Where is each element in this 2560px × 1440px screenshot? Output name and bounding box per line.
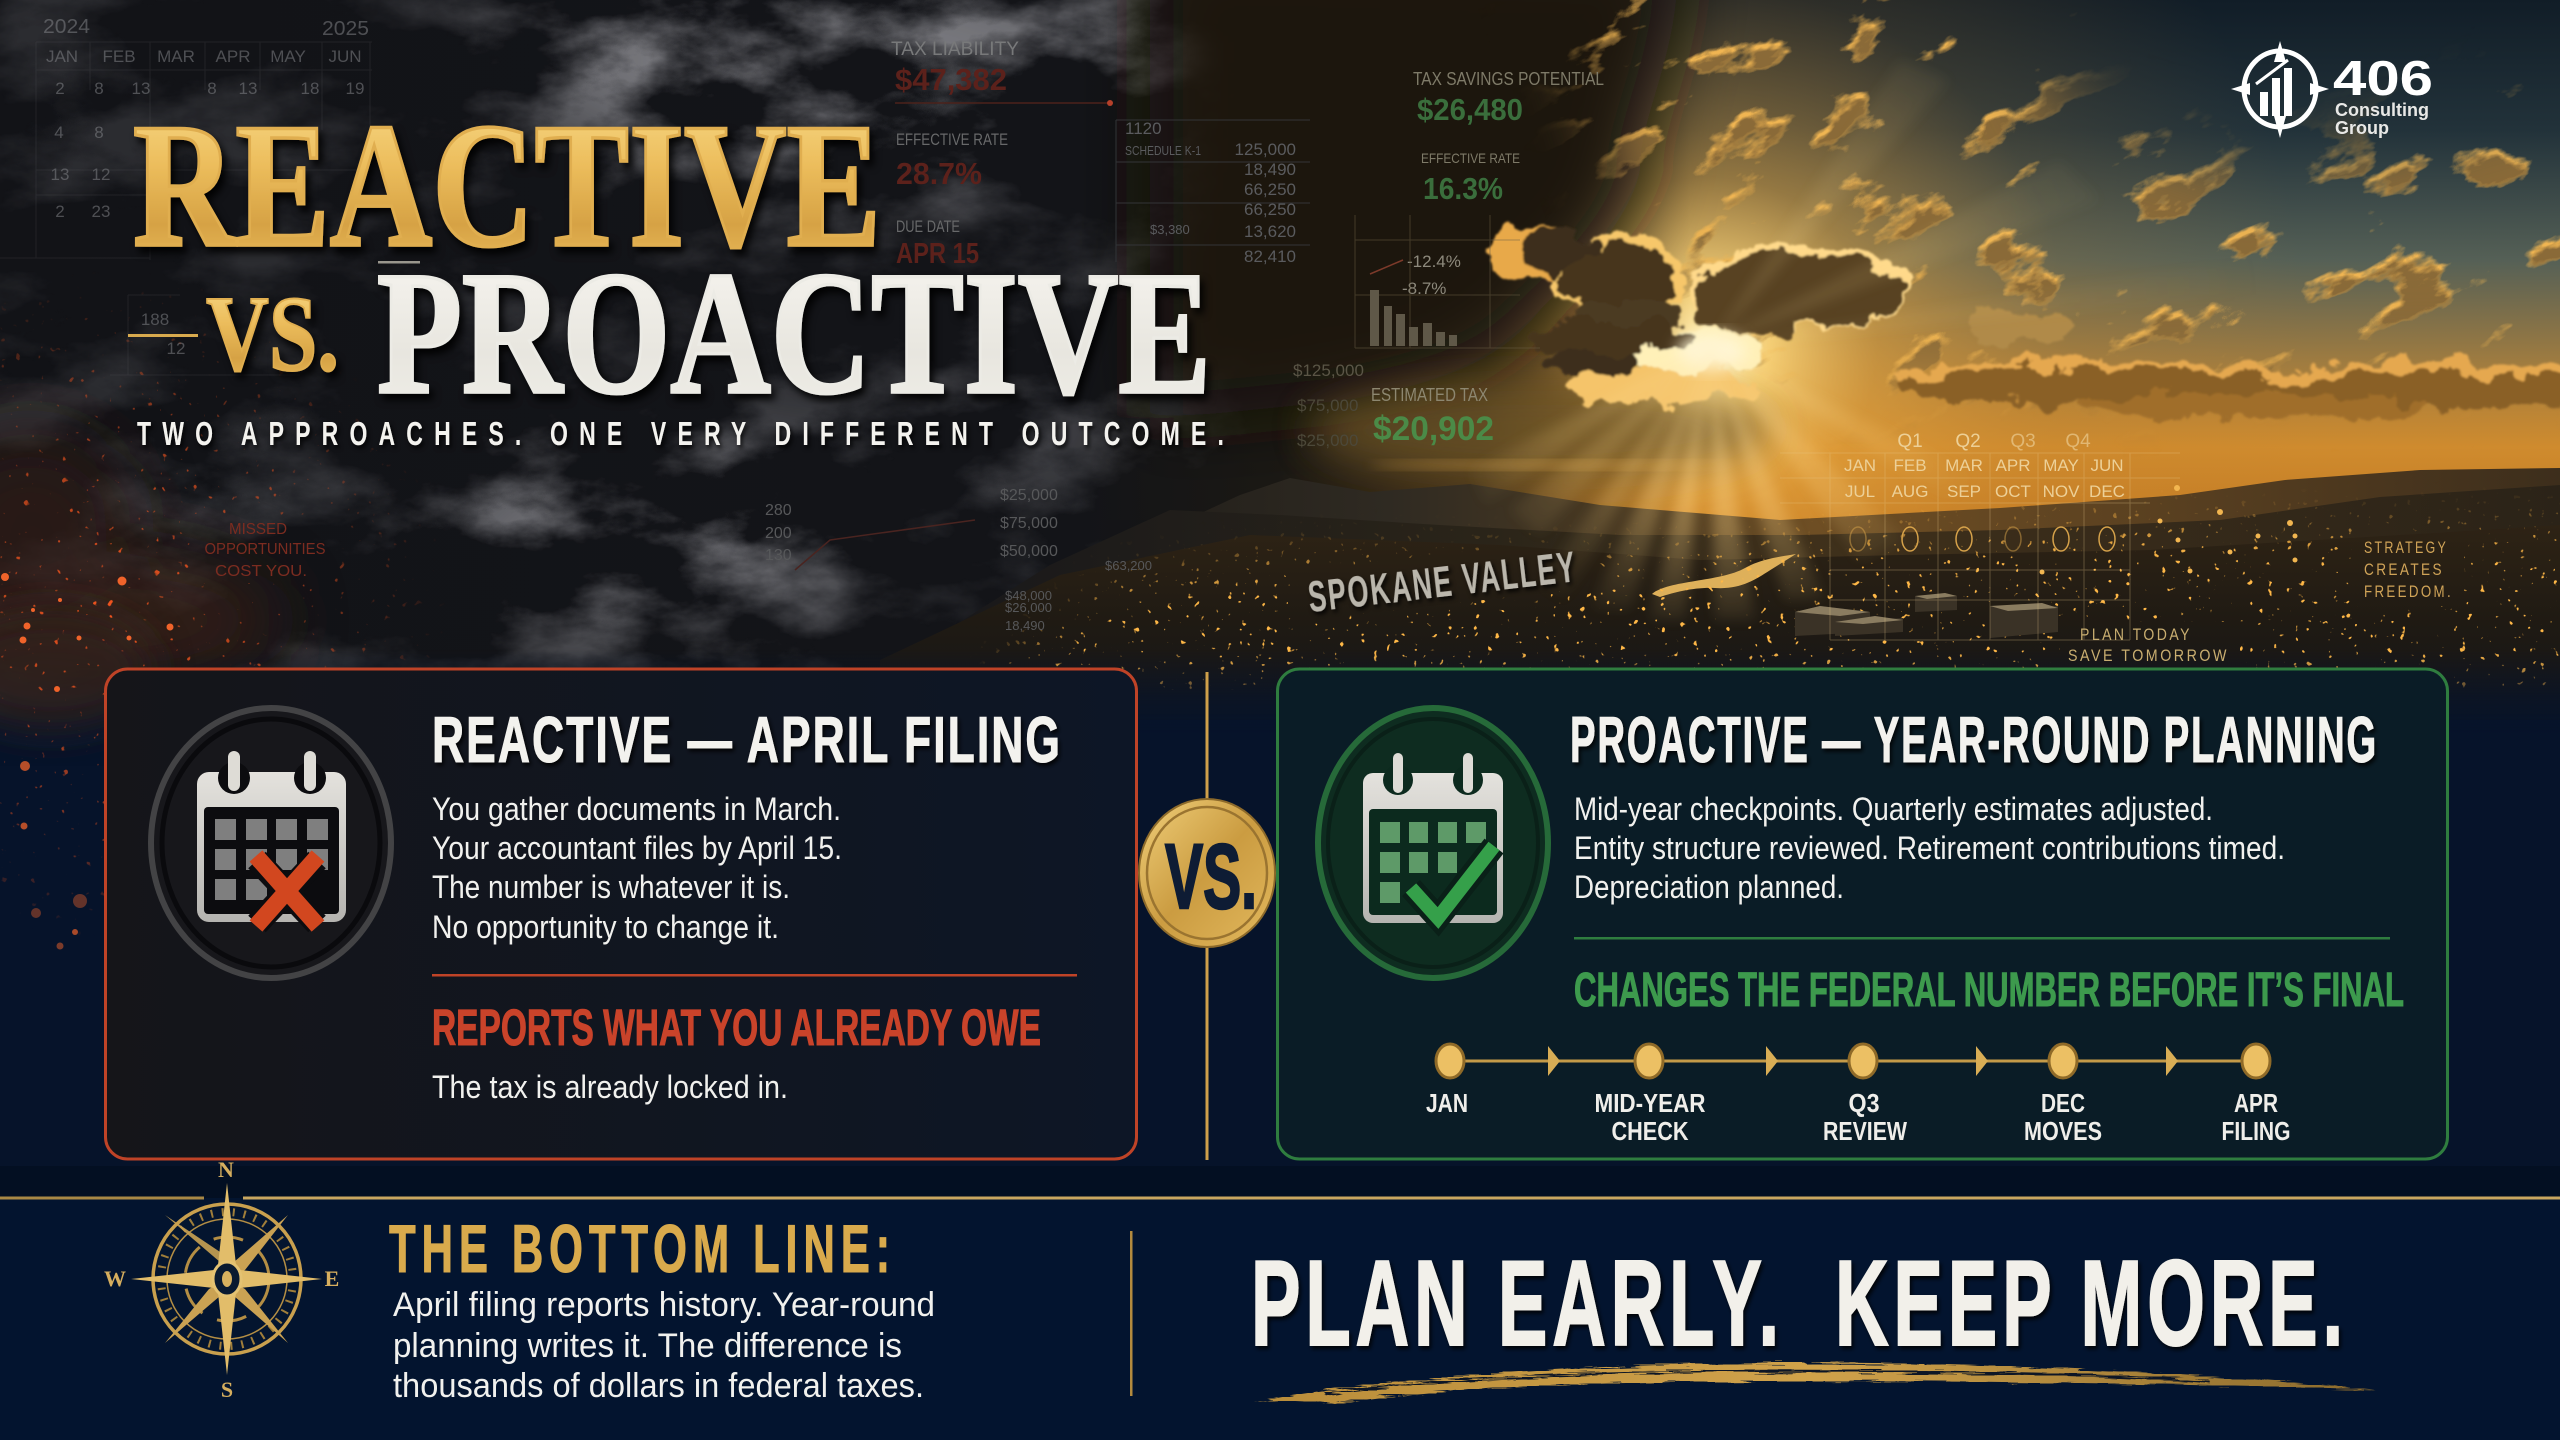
faint lower chart figures: 280 <box>765 502 792 519</box>
title line accents <box>128 261 420 337</box>
quarterly calendar overlay: JUL <box>1845 482 1875 501</box>
timeline nodes <box>1436 1044 2270 1078</box>
faint reactive calendar grid: 19 <box>346 79 364 98</box>
missed opportunities note: OPPORTUNITIES <box>204 541 326 558</box>
strategy note: CREATES <box>2364 560 2444 579</box>
lit cumulus clouds at the sun <box>1484 224 1914 403</box>
compass icon: N <box>218 1157 234 1182</box>
spokane valley sign: SPOKANE VALLEY <box>1306 542 1579 622</box>
reactive heading: REACTIVE — APRIL FILING <box>432 703 1062 776</box>
quarterly calendar overlay: FEB <box>1893 456 1927 475</box>
proactive tax figures: ESTIMATED TAX <box>1371 385 1488 405</box>
strategy note: STRATEGY <box>2364 538 2448 557</box>
panel: proactive <box>1278 669 2448 1159</box>
quarterly calendar overlay: JUN <box>2090 456 2124 475</box>
faint schedule table: 18,490 <box>1244 160 1296 179</box>
missed opportunities note: MISSED <box>229 521 287 538</box>
faint reactive calendar grid: 188 <box>141 310 169 329</box>
plan today note <box>2068 625 2229 665</box>
quarterly calendar overlay: Q1 <box>1897 431 1923 452</box>
faint schedule table: 1120 <box>1125 119 1162 138</box>
horizon glow streak <box>1370 461 1750 469</box>
logo: 406 Consulting Group <box>2231 41 2433 138</box>
faint schedule table: 82,410 <box>1244 247 1296 266</box>
faint reactive calendar grid: 4 <box>54 123 64 142</box>
faint lower chart figures <box>765 487 1152 633</box>
title <box>128 86 1211 431</box>
reactive closing line: The tax is already locked in. <box>432 1069 788 1105</box>
low horizon cloud bank <box>1890 309 2560 422</box>
timeline labels: MID-YEAR <box>1594 1088 1706 1118</box>
quarterly calendar overlay: Q3 <box>2010 431 2036 452</box>
faint lower chart figures: $75,000 <box>1000 515 1058 532</box>
vs coin <box>1139 799 1275 947</box>
faint schedule table: $3,380 <box>1150 222 1190 237</box>
timeline <box>1426 1044 2290 1146</box>
bottom line body <box>393 1286 935 1405</box>
faint tax liability figures: $47,382 <box>895 62 1007 97</box>
faint reactive calendar grid: JAN <box>46 47 78 66</box>
bottom line body: April filing reports history. Year-round <box>393 1286 935 1324</box>
lower ember haze <box>0 610 155 730</box>
fade to navy <box>0 650 2560 735</box>
gold brush stroke <box>1254 1363 2375 1404</box>
faint tax liability figures: 28.7% <box>896 156 982 191</box>
faint reactive calendar grid: 2 <box>55 202 65 221</box>
proactive tax figures: $25,000 <box>1297 431 1358 450</box>
quarterly calendar overlay: Q2 <box>1955 431 1981 452</box>
plan today note: PLAN TODAY <box>2080 625 2192 644</box>
left embers <box>0 292 430 950</box>
logo: 406 Consulting Group: 406 <box>2333 52 2433 106</box>
logo: 406 Consulting Group: Group <box>2335 117 2389 138</box>
proactive tax figures: -8.7% <box>1402 279 1446 298</box>
dark storm side <box>0 0 2560 720</box>
compass icon: E <box>325 1266 339 1291</box>
faint tax liability figures: EFFECTIVE RATE <box>896 130 1008 149</box>
quarterly calendar overlay <box>1780 431 2180 640</box>
reactive body text: The number is whatever it is. <box>432 869 790 905</box>
faint reactive calendar grid: 18 <box>301 79 319 98</box>
faint reactive calendar grid: MAR <box>157 47 195 66</box>
missed opportunities note: COST YOU. <box>215 563 307 580</box>
icon: calendar with green check <box>1318 708 1548 978</box>
center divider <box>1206 672 1208 1160</box>
proactive tax figures: -12.4% <box>1407 252 1461 271</box>
faint lower chart figures: $50,000 <box>1000 543 1058 560</box>
bright hillside lights <box>2040 485 2298 574</box>
proactive body text: Entity structure reviewed. Retirement contributions timed. <box>1574 830 2285 866</box>
bottom line body: planning writes it. The difference is <box>393 1327 902 1365</box>
timeline arrows <box>1548 1046 2178 1076</box>
bottom divider <box>1130 1231 1132 1396</box>
title word: vs: VS. <box>206 275 339 394</box>
reactive body text <box>432 791 842 945</box>
faint tax liability figures: DUE DATE <box>896 217 960 236</box>
faint schedule table: 66,250 <box>1244 180 1296 199</box>
quarterly calendar overlay: MAR <box>1945 456 1983 475</box>
faint lower chart figures: 130 <box>765 547 792 564</box>
storm smoke clouds <box>0 0 1210 668</box>
timeline labels: JAN <box>1426 1088 1468 1118</box>
faint reactive calendar grid: 8 <box>94 79 104 98</box>
quarterly calendar overlay: SEP <box>1947 482 1981 501</box>
faint reactive calendar grid: 2024 <box>43 16 90 38</box>
tagline: TWO APPROACHES. ONE VERY DIFFERENT OUTCOME. <box>137 415 1235 452</box>
faint reactive calendar grid: FEB <box>102 47 136 66</box>
proactive tax figures: $125,000 <box>1293 361 1364 380</box>
proactive tax figures: TAX SAVINGS POTENTIAL <box>1413 69 1604 89</box>
compass icon: S <box>221 1377 233 1402</box>
proactive tax figures <box>1293 69 1604 450</box>
timeline labels: MOVES <box>2024 1116 2102 1146</box>
mountains <box>900 468 2560 720</box>
strategy note: FREEDOM. <box>2364 582 2453 601</box>
river <box>1652 554 1796 597</box>
proactive tax figures: $75,000 <box>1297 396 1358 415</box>
timeline labels: REVIEW <box>1823 1116 1907 1146</box>
faint schedule table: SCHEDULE K-1 <box>1125 143 1201 158</box>
proactive tax figures: 16.3% <box>1423 171 1503 206</box>
title word: proactive: PROACTIVE <box>377 236 1211 431</box>
ember glow <box>0 430 280 690</box>
compass icon: W <box>104 1266 126 1291</box>
title word: reactive: REACTIVE <box>133 86 881 284</box>
proactive body text: Mid-year checkpoints. Quarterly estimates adjusted. <box>1574 791 2213 827</box>
timeline labels: Q3 <box>1848 1088 1880 1118</box>
logo: 406 Consulting Group: Consulting <box>2335 99 2429 120</box>
faint reactive calendar grid: 13 <box>239 79 257 98</box>
vs coin: VS. <box>1165 826 1257 928</box>
quarterly calendar overlay: OCT <box>1995 482 2031 501</box>
quarterly calendar overlay: DEC <box>2089 482 2125 501</box>
faint tax liability figures: APR 15 <box>896 238 979 270</box>
timeline labels: FILING <box>2222 1116 2290 1146</box>
timeline labels <box>1426 1088 2290 1146</box>
faint reactive calendar grid: APR <box>216 47 250 66</box>
faint schedule table: 125,000 <box>1235 140 1296 159</box>
faint reactive calendar grid <box>0 16 372 375</box>
faint reactive calendar grid: 8 <box>207 79 217 98</box>
proactive tax figures: $20,902 <box>1373 410 1494 448</box>
faint lower chart figures: $25,000 <box>1000 487 1058 504</box>
quarterly calendar overlay: Q4 <box>2065 431 2091 452</box>
big dark cloud bank <box>1150 0 1680 420</box>
reactive result: REPORTS WHAT YOU ALREADY OWE <box>432 999 1041 1056</box>
timeline labels: CHECK <box>1612 1116 1689 1146</box>
faint lower chart figures: 18,490 <box>1005 618 1045 633</box>
faint reactive calendar grid: 8 <box>94 123 104 142</box>
faint schedule table: 13,620 <box>1244 222 1296 241</box>
timeline labels: DEC <box>2041 1088 2085 1118</box>
proactive body text: Depreciation planned. <box>1574 869 1844 905</box>
missed opportunities note <box>204 521 326 580</box>
town buildings <box>1795 593 2058 638</box>
faint lower chart figures: $26,000 <box>1005 600 1052 615</box>
faint tax liability figures: TAX LIABILITY <box>891 39 1019 60</box>
proactive tax figures: $26,480 <box>1417 92 1523 127</box>
bottom line body: thousands of dollars in federal taxes. <box>393 1367 924 1405</box>
panel: reactive <box>106 669 1136 1159</box>
faint lower chart figures: $48,000 <box>1005 588 1052 603</box>
quarterly calendar overlay: AUG <box>1892 482 1928 501</box>
faint schedule table <box>1116 119 1310 266</box>
faint reactive calendar grid: 13 <box>132 79 150 98</box>
bottom line heading: THE BOTTOM LINE: <box>389 1211 896 1287</box>
reactive body text: Your accountant files by April 15. <box>432 830 842 866</box>
proactive body text <box>1574 791 2285 905</box>
quarterly calendar overlay: NOV <box>2043 482 2080 501</box>
faint reactive calendar grid: 13 <box>51 165 69 184</box>
faint reactive calendar grid: JUN <box>328 47 362 66</box>
quarterly calendar overlay: APR <box>1996 456 2030 475</box>
warm haze under clouds <box>1310 380 1770 480</box>
golden scattered clouds <box>1536 0 2560 408</box>
quarterly calendar overlay: MAY <box>2043 456 2079 475</box>
bottom band <box>0 1166 2560 1440</box>
faint reactive calendar grid: 12 <box>92 165 110 184</box>
reactive body text: You gather documents in March. <box>432 791 841 827</box>
sun core <box>1678 334 1746 370</box>
faint reactive calendar grid: MAY <box>270 47 306 66</box>
faint lower chart figures: $63,200 <box>1105 558 1152 573</box>
reactive body text: No opportunity to change it. <box>432 909 779 945</box>
proactive tax figures: EFFECTIVE RATE <box>1421 150 1520 166</box>
faint reactive calendar grid: 23 <box>92 202 110 221</box>
city lights <box>982 495 2560 690</box>
sun rays <box>1470 60 2310 620</box>
plan today note: SAVE TOMORROW <box>2068 646 2229 665</box>
timeline labels: APR <box>2234 1088 2278 1118</box>
city valley floor <box>880 525 2560 720</box>
faint reactive calendar grid: 2025 <box>322 18 369 40</box>
sunset sky <box>900 0 2560 720</box>
strategy note <box>2364 538 2453 601</box>
faint lower chart figures: 200 <box>765 525 792 542</box>
compass icon <box>104 1157 339 1402</box>
quarterly calendar overlay: JAN <box>1844 456 1876 475</box>
faint reactive calendar grid: 2 <box>55 79 65 98</box>
navy lower field <box>0 733 2560 1198</box>
faint tax liability figures <box>891 39 1113 270</box>
icon: calendar with red X <box>151 708 391 978</box>
faint reactive calendar grid: 12 <box>167 339 185 358</box>
faint schedule table: 66,250 <box>1244 200 1296 219</box>
